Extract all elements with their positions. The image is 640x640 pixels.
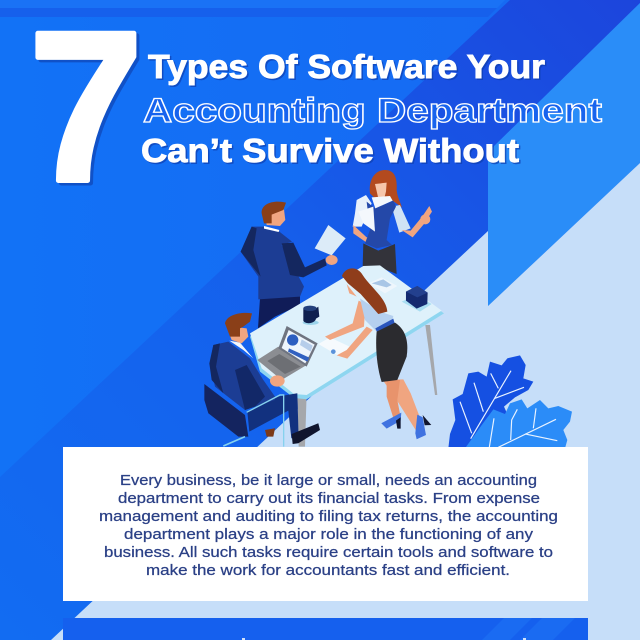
illustration: office team at table bbox=[204, 170, 444, 447]
laptop bbox=[257, 326, 318, 380]
intro paragraph: Every business, be it large or small, needs an accounting bbox=[120, 473, 537, 489]
leaves decoration bbox=[448, 355, 572, 448]
intro paragraph: department to carry out its financial tasks. From expense bbox=[118, 491, 540, 507]
table legs bbox=[297, 325, 437, 447]
intro text card bbox=[63, 447, 588, 601]
title line 2 outlined: Accounting Department bbox=[143, 92, 602, 130]
coffee mug bbox=[303, 306, 319, 325]
title bbox=[141, 48, 602, 170]
title line 3: Can’t Survive Without bbox=[141, 132, 519, 169]
intro paragraph: make the work for accountants fast and efficient. bbox=[146, 563, 510, 579]
light leaf bbox=[465, 399, 572, 448]
office chair bbox=[204, 384, 248, 446]
seated man bbox=[209, 313, 320, 447]
bottom blue panel bbox=[63, 618, 588, 640]
standing woman bbox=[353, 170, 432, 274]
intro paragraph bbox=[99, 473, 558, 579]
intro paragraph: business. All such tasks require certain tools and software to bbox=[104, 545, 553, 561]
standing man with paper bbox=[241, 202, 346, 328]
title line 1: Types Of Software Your bbox=[148, 48, 545, 85]
papers on table bbox=[318, 277, 397, 357]
cube box bbox=[402, 286, 432, 312]
leaning woman bbox=[325, 268, 431, 439]
dark leaf bbox=[448, 355, 533, 448]
intro paragraph: department plays a major role in the functioning of any bbox=[124, 527, 534, 543]
table bbox=[250, 265, 444, 399]
title line 1: Types Of Software Your bbox=[150, 50, 547, 86]
title line 3: Can’t Survive Without bbox=[142, 134, 521, 170]
intro paragraph: management and auditing to filing tax returns, the accounting bbox=[99, 509, 558, 525]
